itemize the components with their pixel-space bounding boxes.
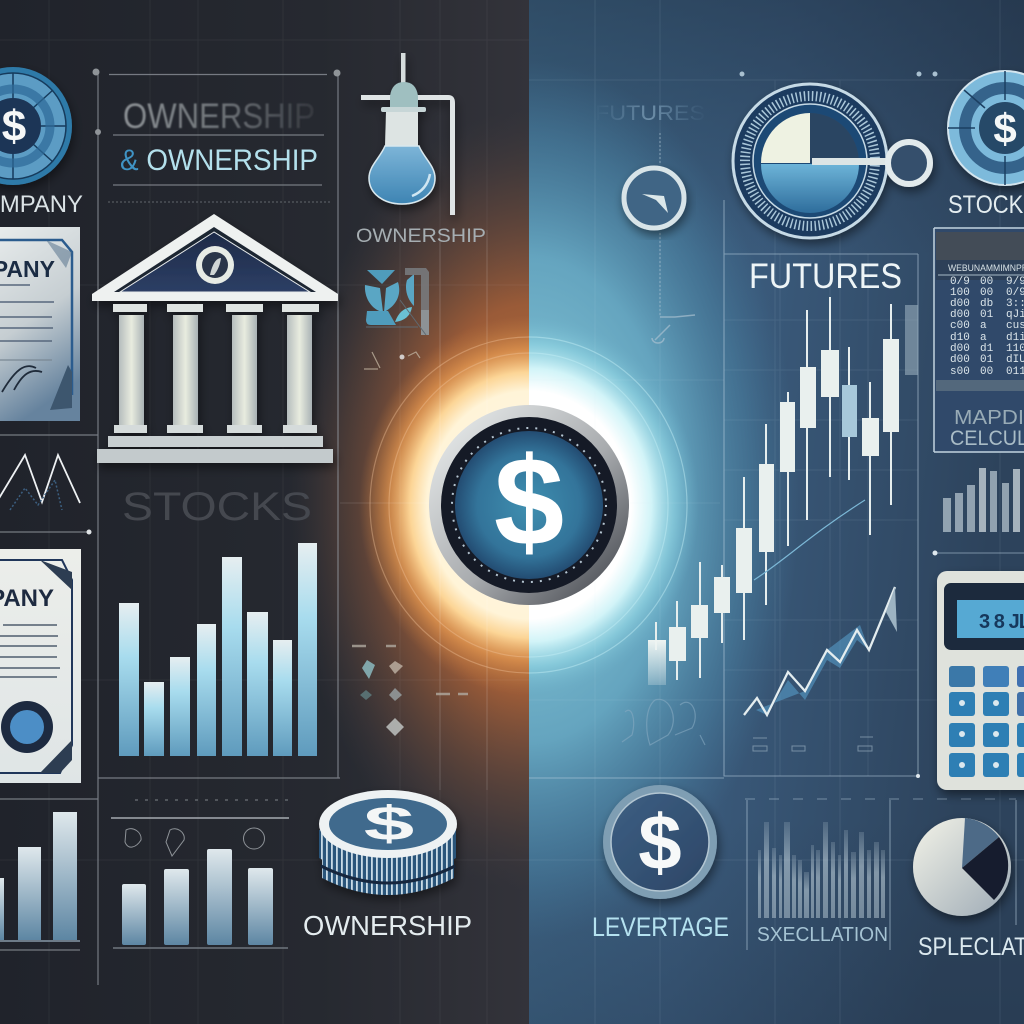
data table panel: a — [980, 332, 987, 344]
icon: leverage coin: $ — [638, 798, 682, 886]
icon: leverage coin — [603, 785, 717, 899]
bar chart: main stocks — [119, 543, 317, 756]
data table panel: d00 — [950, 343, 970, 355]
centre medallion — [429, 405, 629, 605]
certificate two — [0, 549, 81, 783]
data table panel: db — [980, 298, 993, 310]
right frame lines — [529, 200, 1024, 950]
icon: temple — [92, 214, 338, 463]
data table panel: 00 — [980, 366, 993, 378]
chart axis ticks — [753, 737, 873, 751]
data table panel: c00 — [950, 320, 970, 332]
speculation faint bars — [758, 822, 885, 918]
diamond markers — [352, 646, 468, 736]
grid lines — [0, 0, 529, 1024]
bar chart: lower left — [0, 812, 80, 941]
data table panel: d00 — [950, 298, 970, 310]
heading: ownership garbled: OWNERSHIP — [123, 97, 315, 136]
icon: right gauge coin — [948, 71, 1024, 185]
data table panel: d00 — [950, 354, 970, 366]
label: speculation garbled: SXECLLATION — [757, 924, 888, 946]
faded sketch icon — [622, 699, 705, 745]
icon: coin stack — [319, 790, 457, 895]
data table panel: 00 — [980, 276, 993, 288]
panel: futures blue background — [529, 0, 1024, 1024]
label: ownership lower: OWNERSHIP — [303, 910, 472, 941]
data table panel: a — [980, 320, 987, 332]
icon: coin stack: $ — [364, 797, 414, 851]
certificate one — [0, 227, 80, 421]
icon: pie dial with key — [733, 84, 930, 238]
data table panel: 100 — [950, 287, 970, 299]
pie chart — [913, 818, 1011, 916]
icon: blue abstract glyph — [365, 268, 429, 335]
data table panel: d10 — [950, 332, 970, 344]
panel: stocks dark background — [304, 0, 529, 1024]
icon: small ring — [624, 168, 684, 228]
data table panel: 0/9 — [950, 276, 970, 288]
data table panel: MAPDI — [954, 407, 1024, 429]
zigzag line chart — [0, 455, 80, 510]
data table panel: s00 — [950, 366, 970, 378]
icon: right gauge coin: $ — [993, 105, 1017, 152]
halo arcs around centre — [370, 337, 688, 673]
label: stocks faint: STOCKS — [122, 485, 312, 529]
icon: left gauge coin — [0, 67, 72, 185]
rising line chart — [744, 587, 897, 715]
data table panel: 01 — [980, 354, 994, 366]
icon: calculator — [937, 571, 1024, 790]
heading: futures: FUTURES — [749, 257, 902, 296]
data table panel: d1 — [980, 343, 994, 355]
icon: light bulb — [361, 53, 455, 215]
heading: and ownership: & OWNERSHIP — [120, 144, 318, 177]
label: ownership small: OWNERSHIP — [356, 226, 486, 247]
small faded marks — [364, 352, 420, 369]
centre medallion: $ — [494, 431, 564, 572]
data table panel: 01 — [980, 309, 994, 321]
data table panel: 00 — [980, 287, 993, 299]
label: leverage: LEVERTAGE — [592, 912, 729, 942]
data table panel — [934, 228, 1024, 452]
bar chart: small right — [943, 468, 1020, 532]
label: futures faint: FUTURES — [595, 102, 705, 125]
small faded sketch — [652, 315, 695, 343]
icon: left gauge coin: $ — [2, 102, 26, 151]
left frame lines — [0, 72, 340, 985]
candlestick chart — [648, 297, 918, 685]
data table panel: d00 — [950, 309, 970, 321]
bar chart: lower centre — [111, 818, 289, 948]
